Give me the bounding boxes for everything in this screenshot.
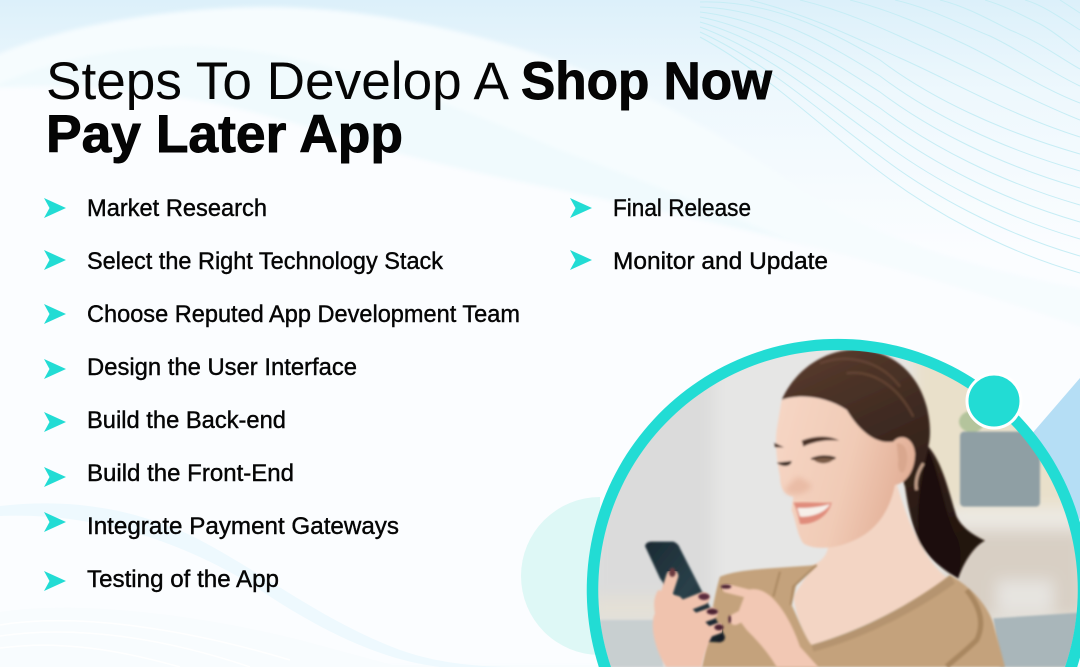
- right hand: [727, 588, 818, 667]
- plant pot on shelf: [959, 411, 1040, 507]
- light blue triangle: [1030, 378, 1080, 520]
- phone: [645, 542, 725, 642]
- item: Choose Reputed App Development Team: Choose Reputed App Development Team: [87, 301, 520, 328]
- blurred room backdrop: [600, 362, 1078, 617]
- title: [46, 52, 773, 164]
- list column 2: [570, 195, 828, 275]
- decorative curved lines top right: [700, 0, 1080, 273]
- item: Market Research: Market Research: [87, 195, 267, 222]
- sweater: [702, 565, 1005, 667]
- light teal background circle: [521, 497, 600, 655]
- item: Select the Right Technology Stack: Select the Right Technology Stack: [87, 248, 444, 275]
- item: Testing of the App: Testing of the App: [87, 566, 279, 593]
- nails: [669, 568, 731, 630]
- nose shading: [785, 477, 812, 494]
- item: Integrate Payment Gateways: Integrate Payment Gateways: [87, 513, 399, 540]
- item: Build the Back-end: Build the Back-end: [87, 407, 286, 434]
- bottom left wave ribbon: [0, 503, 520, 667]
- teal dot on ring: [967, 374, 1021, 428]
- item: Monitor and Update: Monitor and Update: [613, 248, 828, 275]
- left hand: [653, 576, 718, 667]
- sofa: [600, 613, 1080, 667]
- title: Steps To Develop A: [46, 52, 510, 111]
- woman figure: [774, 349, 985, 647]
- title: Pay Later App: [46, 105, 403, 164]
- teal ring around photo: [587, 339, 1080, 667]
- item: Design the User Interface: Design the User Interface: [87, 354, 357, 381]
- title: Shop Now: [521, 52, 773, 111]
- item: Build the Front-End: Build the Front-End: [87, 460, 294, 487]
- smile: [793, 502, 832, 524]
- list column 1: [44, 195, 520, 593]
- item: Final Release: Final Release: [613, 195, 751, 222]
- photo: woman smiling at phone: [590, 340, 1080, 667]
